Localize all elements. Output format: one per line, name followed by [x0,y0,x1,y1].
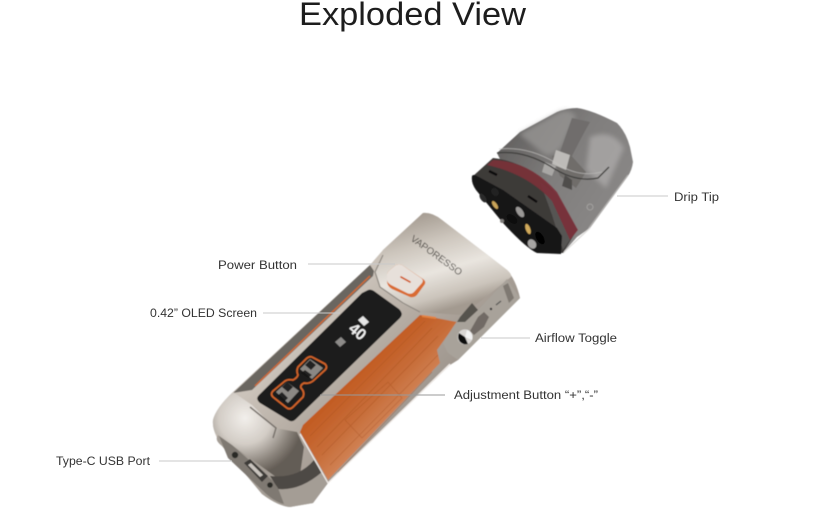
pod black contact base [472,175,562,254]
brand name: VAPORESSO [408,234,464,278]
dark cap stripe [270,460,322,489]
pod dark lower body [472,158,577,253]
orange side stripe [255,276,370,386]
leather panel [300,315,457,480]
top cap [375,213,511,315]
label: adjustment button: Adjustment Button “+”,“-” [454,390,598,402]
adjustment buttons [272,357,326,409]
pod translucent shell [497,108,633,253]
body shell [213,213,520,507]
screen readout [335,316,369,347]
pod shoulder seam [497,153,609,179]
airflow slider slot [470,312,489,335]
label: airflow toggle: Airflow Toggle [535,333,617,345]
power button [387,264,425,297]
bevel lines [375,255,420,312]
pod logo [587,204,593,210]
bottom cap [213,392,304,480]
side plate [443,279,520,360]
leather panel white edge [300,364,450,483]
USB port [232,452,273,488]
device: pod cartridge [472,108,633,254]
screen panel [257,290,402,421]
port face [219,436,284,504]
plus button [300,359,323,379]
airflow toggle [457,301,501,345]
label: power button: Power Button [218,260,297,272]
screen readout: 40 [345,320,369,344]
pod clips [489,171,537,202]
pod contacts and holes [478,186,547,250]
label: drip tip: Drip Tip [674,192,719,204]
label: OLED screen: 0.42” OLED Screen [150,308,257,320]
side plate window [503,283,514,303]
dark side step [457,303,478,322]
lower metal cap face [217,435,328,507]
pod red band [487,160,578,240]
device: main body [213,213,520,507]
leader lines [159,196,668,461]
pod inner tanks and chimney [497,111,628,253]
label: USB port: Type-C USB Port [56,456,151,468]
leather texture [310,321,438,472]
minus button [276,382,299,403]
left dark edge [233,265,374,393]
